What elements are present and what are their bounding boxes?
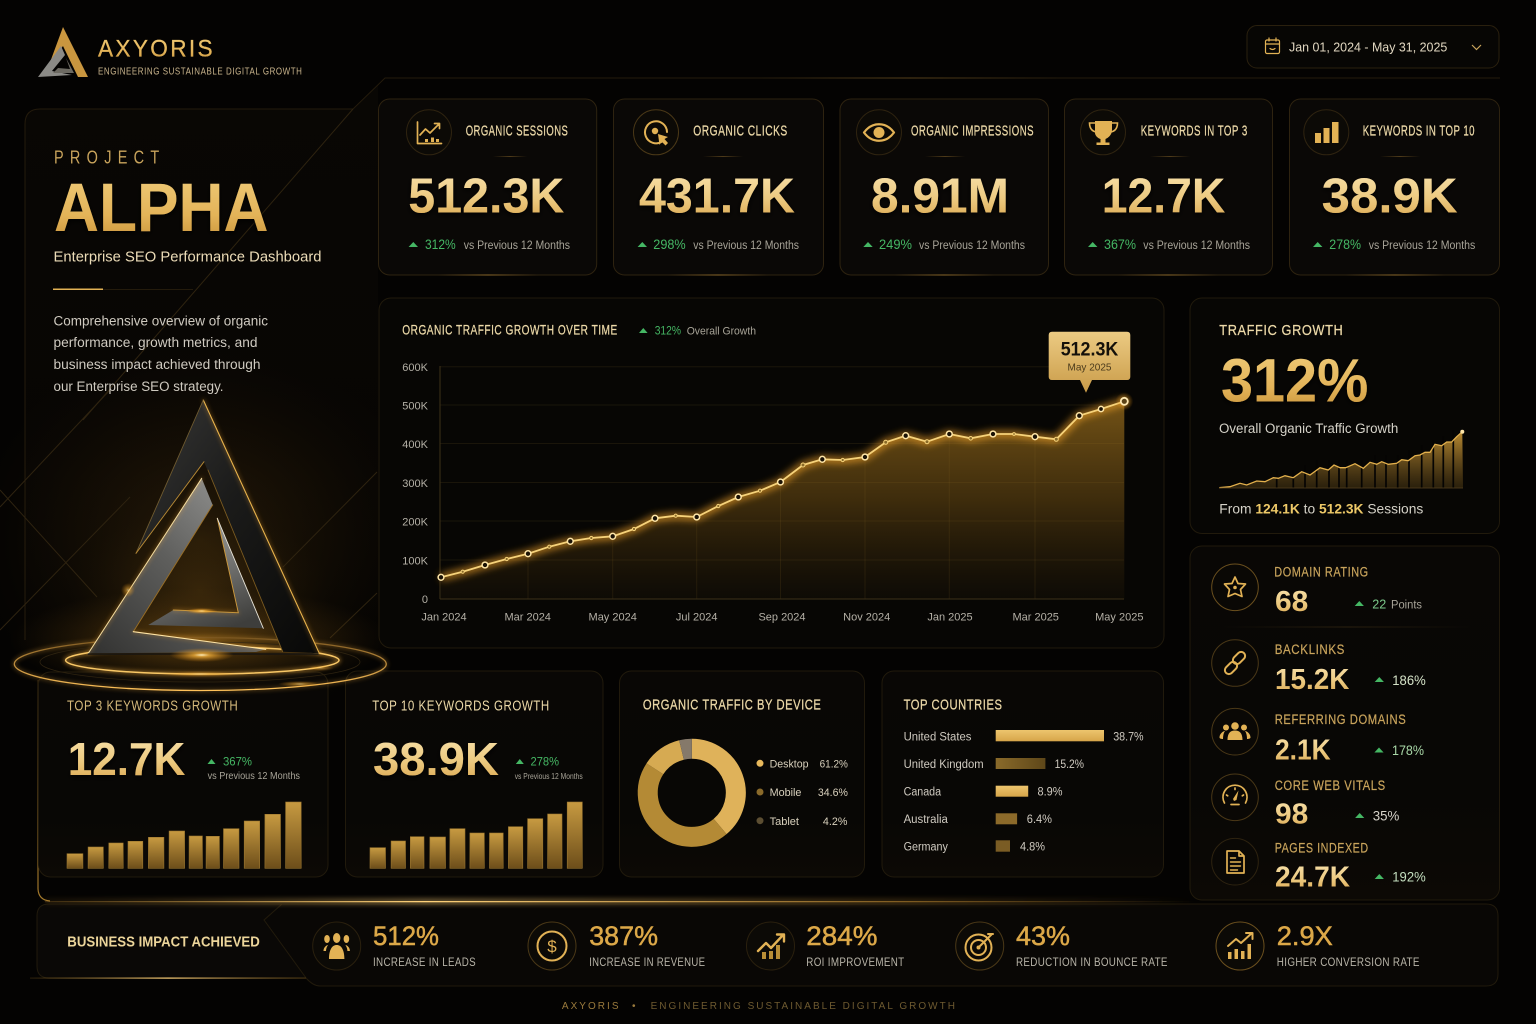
description text: business impact achieved through [54, 357, 260, 372]
triangle gold edge highlights [88, 400, 319, 654]
card title: ORGANIC CLICKS [693, 123, 788, 139]
icon: bars [1304, 110, 1349, 155]
change: 312% [425, 237, 456, 252]
value: 38.9K [373, 733, 499, 785]
line chart [438, 366, 1133, 599]
metric: referring domains: 178% [1392, 743, 1424, 758]
heading: ORGANIC TRAFFIC BY DEVICE [643, 697, 821, 713]
impact: roi [746, 921, 905, 970]
icon: calendar [1266, 38, 1280, 54]
x axis labels: Nov 2024 [843, 612, 890, 624]
icon: trophy [1080, 110, 1126, 155]
y axis labels: 100K [402, 556, 429, 568]
legend [756, 758, 848, 828]
y axis labels: 200K [402, 516, 429, 528]
description text [54, 313, 268, 394]
triangle dark outer shape [136, 400, 319, 653]
change [409, 237, 570, 252]
change: vs Previous 12 Months [1143, 240, 1250, 252]
panel: business impact band [30, 898, 1498, 986]
metric: domain rating: 22 [1372, 596, 1386, 611]
change: vs Previous 12 Months [919, 240, 1025, 252]
change [208, 756, 300, 782]
impact: conversion rate [1216, 921, 1420, 970]
change: 278% [530, 756, 559, 768]
impact: leads: 512% [373, 921, 439, 951]
impact: bounce rate [956, 921, 1168, 970]
y axis labels [402, 362, 429, 606]
callout: peak value tooltip: 512.3K [1061, 340, 1119, 361]
card: keywords in top 3 [1064, 99, 1272, 276]
change [863, 237, 1025, 252]
change [1088, 237, 1250, 252]
chart heading: ORGANIC TRAFFIC GROWTH OVER TIME [402, 322, 618, 338]
metric: backlinks: BACKLINKS [1275, 642, 1345, 657]
callout: peak value tooltip: May 2025 [1068, 362, 1112, 374]
date text: Jan 01, 2024 - May 31, 2025 [1289, 40, 1447, 55]
x axis labels [421, 612, 1143, 624]
x axis labels: Sep 2024 [758, 612, 806, 624]
metric: core web vitals [1212, 774, 1399, 831]
metric: referring domains: REFERRING DOMAINS [1275, 712, 1406, 727]
title: alpha: ALPHA [54, 169, 268, 246]
metric: domain rating [1212, 564, 1422, 618]
description text: our Enterprise SEO strategy. [54, 379, 224, 394]
horizontal bar chart: Germany [904, 842, 948, 854]
value: 12.7K [1102, 169, 1225, 223]
header: brand logo and name [38, 27, 302, 78]
brand tagline: ENGINEERING SUSTAINABLE DIGITAL GROWTH [98, 67, 302, 78]
lower frame glow line [38, 680, 50, 901]
heading: BUSINESS IMPACT ACHIEVED [67, 934, 260, 951]
metric: core web vitals: 35% [1373, 808, 1399, 823]
x axis labels: May 2025 [1095, 612, 1143, 624]
triangle inner metal shape [148, 518, 263, 628]
bar chart [370, 802, 582, 868]
change [515, 756, 583, 781]
change: vs Previous 12 Months [464, 240, 570, 252]
horizontal bar chart: United States [904, 732, 972, 744]
change: 249% [879, 237, 912, 252]
impact: revenue [528, 921, 705, 970]
panel: top 10 keywords growth [346, 671, 603, 877]
impact: roi: 284% [806, 921, 878, 951]
callout: peak value tooltip [1049, 332, 1130, 393]
metric: core web vitals: 98 [1275, 799, 1308, 831]
change: vs Previous 12 Months [693, 240, 799, 252]
value: 12.7K [68, 733, 186, 785]
sparkline chart [1219, 430, 1464, 488]
x axis labels: Mar 2024 [504, 612, 551, 624]
panel: top countries [882, 671, 1164, 877]
panel: organic traffic growth chart [379, 298, 1164, 648]
metric: pages indexed: 192% [1392, 870, 1426, 885]
legend: 34.6% [818, 787, 848, 799]
footer tagline: • [632, 1001, 636, 1012]
horizontal bar chart: 15.2% [1055, 759, 1084, 771]
change [1313, 237, 1476, 252]
x axis labels: Jan 2024 [421, 612, 467, 624]
panel: traffic growth [1190, 298, 1500, 534]
horizontal bar chart: United Kingdom [904, 759, 984, 771]
change: 367% [223, 756, 252, 768]
metric: referring domains [1212, 708, 1424, 766]
panel: seo metrics [1190, 546, 1500, 900]
ring glow base [14, 638, 386, 690]
y axis labels: 300K [402, 478, 429, 490]
card: organic impressions [840, 99, 1048, 276]
icon: click target [634, 110, 678, 155]
footer tagline: ENGINEERING SUSTAINABLE DIGITAL GROWTH [651, 1001, 955, 1012]
big value: 312% [1221, 347, 1368, 415]
bar chart [67, 802, 301, 868]
horizontal bar chart: 38.7% [1113, 732, 1144, 744]
icon: growth chart [406, 110, 452, 155]
metric: pages indexed [1212, 838, 1426, 894]
icon: chevron [1472, 45, 1481, 50]
card title: KEYWORDS IN TOP 3 [1141, 123, 1248, 139]
description text: Comprehensive overview of organic [54, 313, 268, 328]
change: 367% [1104, 237, 1136, 252]
horizontal bar chart: Canada [904, 786, 942, 798]
y axis labels: 600K [402, 362, 429, 374]
card title: KEYWORDS IN TOP 10 [1363, 123, 1475, 139]
description text: performance, growth metrics, and [54, 335, 258, 350]
impact: bounce rate: REDUCTION IN BOUNCE RATE [1016, 955, 1168, 969]
impact: revenue: 387% [589, 921, 658, 951]
impact: leads: INCREASE IN LEADS [373, 955, 476, 969]
metric: core web vitals: CORE WEB VITALS [1275, 778, 1386, 793]
heading: TOP 3 KEYWORDS GROWTH [67, 699, 238, 715]
y axis labels: 400K [402, 439, 429, 451]
label: project: PROJECT [54, 146, 166, 167]
subtitle: Enterprise SEO Performance Dashboard [54, 248, 322, 265]
impact: leads [313, 921, 476, 970]
impact: conversion rate: HIGHER CONVERSION RATE [1277, 955, 1420, 969]
footer tagline: AXYORIS [562, 1001, 619, 1012]
horizontal bar chart: 4.8% [1020, 842, 1045, 854]
overall growth badge [639, 326, 756, 338]
metric: pages indexed: PAGES INDEXED [1275, 841, 1369, 856]
overall growth badge: Overall Growth [687, 326, 756, 338]
legend: Desktop [770, 758, 809, 770]
metric: backlinks: 186% [1392, 673, 1426, 688]
impact: roi: ROI IMPROVEMENT [806, 955, 905, 969]
change: vs Previous 12 Months [208, 771, 300, 782]
legend: Mobile [770, 787, 801, 799]
card title: ORGANIC IMPRESSIONS [911, 123, 1034, 139]
x axis labels: May 2024 [589, 612, 637, 624]
metric: domain rating: DOMAIN RATING [1274, 565, 1369, 580]
legend: 61.2% [820, 758, 848, 770]
overall growth badge: 312% [655, 326, 681, 338]
y axis labels: 500K [402, 400, 429, 412]
heading: TOP 10 KEYWORDS GROWTH [372, 699, 550, 715]
range text: From 124.1K to 512.3K Sessions [1219, 501, 1423, 517]
date range selector [1247, 26, 1499, 68]
horizontal bar chart: Australia [904, 814, 948, 826]
panel: top 3 keywords growth [38, 672, 328, 877]
change [638, 237, 799, 252]
legend: 4.2% [823, 816, 848, 828]
x axis labels: Jan 2025 [927, 612, 973, 624]
metric: domain rating: Points [1391, 599, 1422, 611]
value: 8.91M [871, 169, 1009, 223]
x axis labels: Mar 2025 [1012, 612, 1059, 624]
panel: organic traffic by device [620, 671, 864, 877]
metric: backlinks [1212, 640, 1426, 696]
metric: pages indexed: 24.7K [1275, 862, 1350, 894]
icon: large 3D triangle logo with rings [10, 400, 390, 692]
value: 512.3K [408, 169, 564, 223]
x axis labels: Jul 2024 [676, 612, 717, 624]
metric: backlinks: 15.2K [1275, 664, 1349, 696]
brand name: AXYORIS [98, 36, 215, 63]
flares [121, 583, 334, 687]
impact: bounce rate: 43% [1016, 921, 1070, 951]
icon: eye [856, 110, 902, 155]
change: 278% [1329, 237, 1361, 252]
heading: TRAFFIC GROWTH [1219, 322, 1343, 339]
horizontal bar chart [904, 730, 1144, 854]
value: 431.7K [639, 169, 795, 223]
heading: TOP COUNTRIES [904, 697, 1002, 713]
change: vs Previous 12 Months [1369, 240, 1476, 252]
triangle mid metal shape [88, 478, 266, 653]
y axis labels: 0 [422, 594, 428, 606]
card: organic clicks [614, 99, 824, 276]
panel: project alpha hero [0, 78, 1500, 740]
change: 298% [653, 237, 686, 252]
metric: domain rating: 68 [1275, 586, 1308, 618]
legend: Tablet [770, 816, 799, 828]
card: keywords in top 10 [1290, 99, 1500, 276]
value: 38.9K [1322, 169, 1458, 223]
icon: small triangle logo [38, 27, 88, 77]
horizontal bar chart: 6.4% [1027, 814, 1052, 826]
description: Overall Organic Traffic Growth [1219, 421, 1398, 436]
impact: revenue: $ [547, 937, 557, 956]
metric: referring domains: 2.1K [1275, 734, 1331, 766]
impact: conversion rate: 2.9X [1277, 921, 1333, 951]
impact: revenue: INCREASE IN REVENUE [589, 955, 705, 969]
donut chart [648, 749, 736, 837]
horizontal bar chart: 8.9% [1038, 786, 1062, 798]
card: organic sessions [378, 99, 597, 276]
change: vs Previous 12 Months [515, 771, 583, 781]
card title: ORGANIC SESSIONS [466, 123, 568, 139]
